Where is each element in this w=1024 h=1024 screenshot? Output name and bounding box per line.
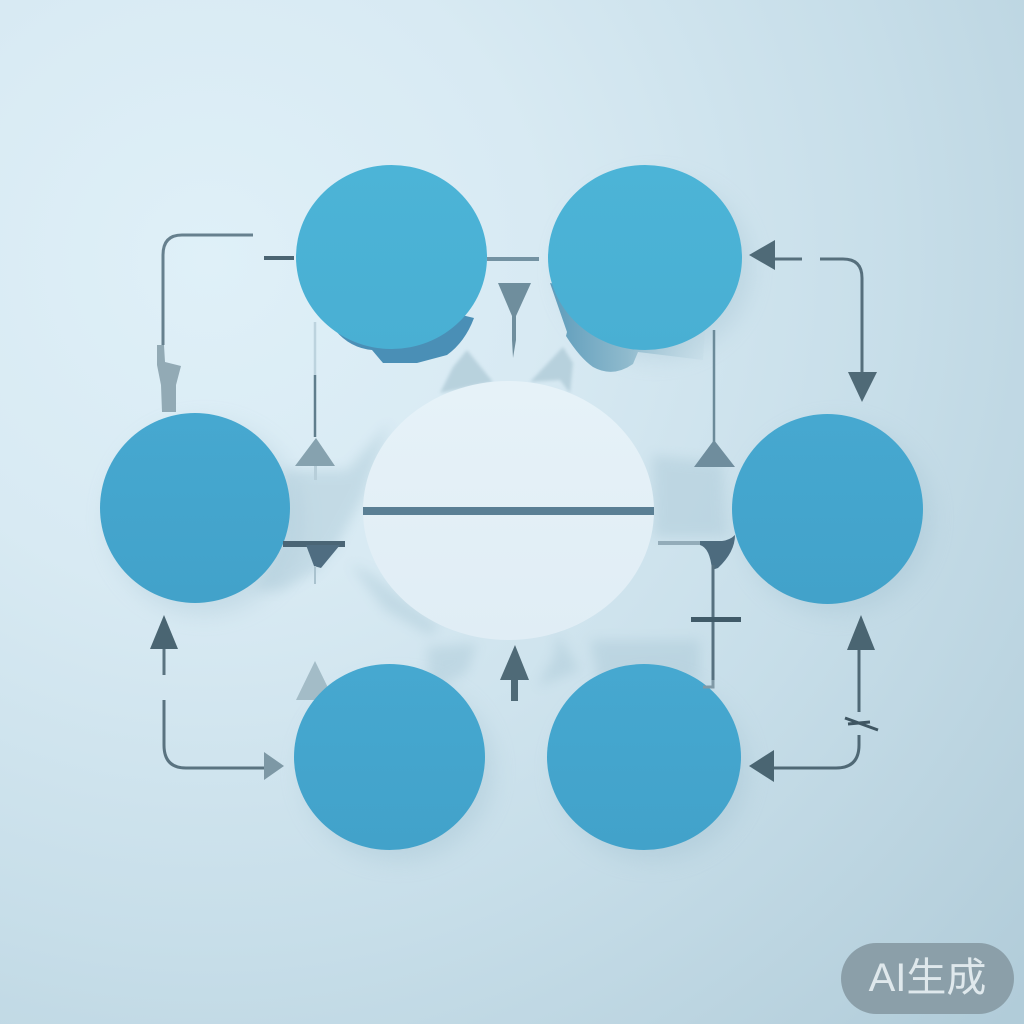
badge: AI generated: AI生成 — [869, 956, 986, 1000]
arrow: inner left up — [295, 322, 335, 480]
circle: left — [100, 413, 290, 603]
arrow: left upward stub — [157, 345, 181, 412]
arrow: inner right up — [694, 330, 735, 467]
circle: top left — [296, 165, 487, 349]
arrow: right connector — [658, 535, 741, 687]
circle: bottom right — [547, 664, 741, 850]
arrow: top left bracket — [163, 235, 539, 345]
under-circle shadow: top left — [335, 300, 474, 363]
circle: top right — [548, 165, 742, 350]
arrow: bottom left bracket — [150, 615, 284, 780]
circle: bottom left — [294, 664, 485, 850]
arrow: top right bracket — [749, 240, 877, 402]
arrow: left connector — [283, 541, 345, 584]
arrow: top centre down — [498, 283, 531, 358]
arrow: bottom right bracket — [749, 615, 878, 782]
badge: AI generated — [841, 943, 1014, 1014]
arrow: bottom left small triangle — [296, 661, 334, 700]
circle: right — [732, 414, 923, 604]
under-circle shadow: top right — [550, 283, 705, 372]
panel: center disc — [363, 381, 654, 640]
soft shadows — [109, 178, 931, 860]
arrow: bottom centre up — [500, 645, 529, 701]
